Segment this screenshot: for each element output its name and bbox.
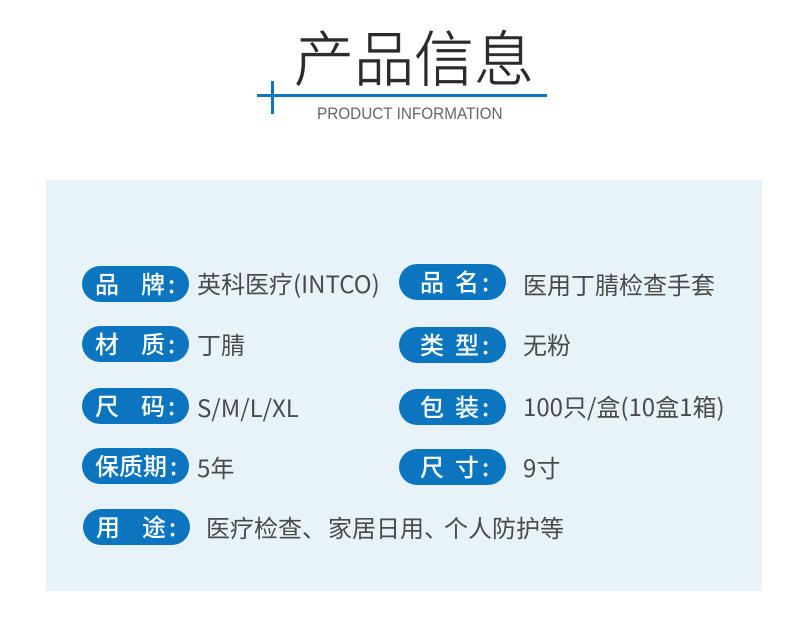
label: glove length: 尺 bbox=[420, 448, 444, 483]
label: size: 尺 bbox=[95, 387, 119, 422]
label: packaging: 装: bbox=[455, 388, 489, 423]
value: material: 丁腈 bbox=[197, 326, 245, 361]
title: 产品信息 bbox=[294, 12, 534, 99]
label: type: 型: bbox=[455, 326, 489, 361]
value: glove length: 9寸 bbox=[523, 449, 560, 484]
label: product name bbox=[399, 264, 506, 300]
value: packaging: 100只/盒(10盒1箱) bbox=[523, 388, 725, 423]
label: usage bbox=[83, 509, 190, 545]
label: brand: 品 bbox=[95, 265, 119, 300]
value: type: 无粉 bbox=[523, 326, 571, 361]
label: brand bbox=[82, 266, 189, 302]
label: usage: 用 bbox=[96, 508, 120, 543]
value: product name: 医用丁腈检查手套 bbox=[523, 266, 715, 301]
label: usage: 途: bbox=[142, 508, 176, 543]
value: size: S/M/L/XL bbox=[197, 389, 299, 424]
label: type: 类 bbox=[420, 326, 444, 361]
label: packaging: 包 bbox=[420, 388, 444, 423]
label: material: 材 bbox=[95, 325, 119, 360]
label: type bbox=[399, 327, 506, 363]
label: brand: 牌: bbox=[141, 265, 175, 300]
label: glove length bbox=[399, 449, 506, 485]
panel: product specifications bbox=[46, 180, 762, 591]
label: size: 码: bbox=[141, 387, 175, 422]
label: product name: 品 bbox=[420, 263, 444, 298]
value: shelf life: 5年 bbox=[197, 449, 234, 484]
label: material: 质: bbox=[141, 325, 175, 360]
value: brand: 英科医疗(INTCO) bbox=[197, 265, 380, 300]
label: product name: 名: bbox=[455, 263, 489, 298]
subtitle: PRODUCT INFORMATION bbox=[317, 104, 503, 123]
label: shelf life: 保质期: bbox=[95, 447, 177, 482]
label: material bbox=[82, 326, 189, 362]
label: packaging bbox=[399, 389, 506, 425]
title underline with cross bbox=[257, 81, 547, 114]
value: usage: 医疗检查、家居日用、个人防护等 bbox=[206, 509, 564, 544]
label: glove length: 寸: bbox=[455, 448, 489, 483]
label: size bbox=[82, 388, 189, 424]
